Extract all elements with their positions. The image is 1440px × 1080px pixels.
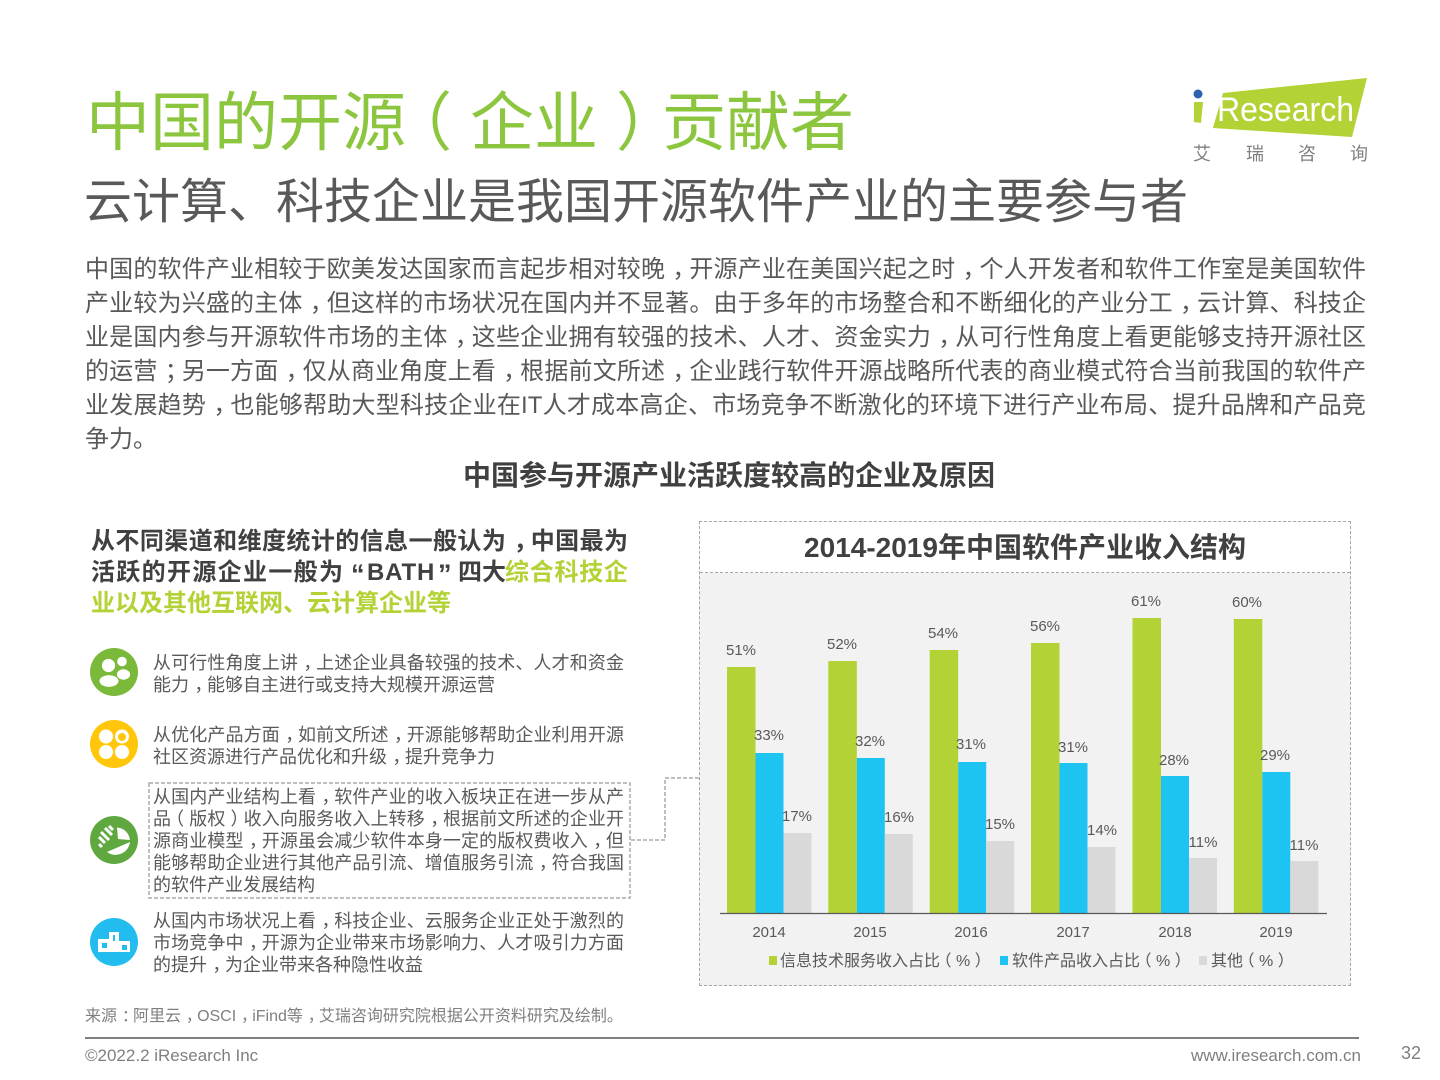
- body paragraph: 争力。: [85, 426, 157, 453]
- logo: iResearch: 咨: [1298, 140, 1316, 166]
- body paragraph: 业是国内参与开源软件市场的主体 ，这些企业拥有较强的技术、人才、资金实力 ，从可行性角度上看更能够支持开源社区: [85, 324, 1366, 351]
- bar chart: 56%: [1030, 618, 1060, 635]
- logo: iResearch: Research: [1217, 91, 1354, 129]
- bar chart: 2014: [752, 924, 786, 941]
- source note: 来源 ：阿里云 ，OSCI ，iFind等 ，艾瑞咨询研究院根据公开资料研究及绘制。: [85, 1008, 623, 1025]
- chart title: [700, 522, 1350, 573]
- callout: industry structure text: 源商业模型 ，开源虽会减少软件本身一定的版权费收入 ，但: [153, 831, 624, 851]
- text: feasibility: 能力 ，能够自主进行或支持大规模开源运营: [153, 675, 495, 695]
- body paragraph: 的运营 ；另一方面 ，仅从商业角度上看 ，根据前文所述 ，企业践行软件开源战略所代表的商业模式符合当前我国的软件产: [85, 358, 1366, 385]
- bar chart: [720, 593, 1327, 941]
- bar chart: 29%: [1260, 747, 1290, 764]
- bar chart: 31%: [956, 736, 986, 753]
- subtitle: 云计算、科技企业是我国开源软件产业的主要参与者: [84, 176, 1188, 229]
- chart legend: 其他（ % ）: [1211, 953, 1294, 970]
- icon: people group: [90, 648, 138, 696]
- bar chart: 14%: [1087, 822, 1117, 839]
- bar chart: 33%: [754, 727, 784, 744]
- page number: 32: [1401, 1043, 1421, 1063]
- bar chart: 28%: [1159, 752, 1189, 769]
- footer rule: [85, 1037, 1359, 1039]
- logo: iResearch: 艾: [1193, 140, 1211, 166]
- chart legend: 信息技术服务收入占比（ % ）: [780, 953, 991, 970]
- text: market competition: 市场竞争中 ，开源为企业带来市场影响力、人才吸引力方面: [153, 933, 624, 953]
- callout: industry structure text: 从国内产业结构上看 ，软件产业的收入板块正在进一步从产: [153, 787, 624, 807]
- chart legend: 软件产品收入占比（ % ）: [1012, 953, 1191, 970]
- left summary text: 活跃的开源企业一般为: [91, 559, 343, 586]
- callout: industry structure text: 能够帮助企业进行其他产品引流、增值服务引流 ，符合我国: [153, 853, 624, 873]
- bar chart: 11%: [1290, 837, 1318, 854]
- text: market competition: 的提升 ，为企业带来各种隐性收益: [153, 955, 423, 975]
- left summary text: 从不同渠道和维度统计的信息一般认为 ，中国最为: [91, 528, 628, 555]
- bar chart: 61%: [1131, 593, 1161, 610]
- body paragraph: 中国的软件产业相较于欧美发达国家而言起步相对较晚 ，开源产业在美国兴起之时 ，个人开发者和软件工作室是美国软件: [85, 256, 1366, 283]
- chart legend: [769, 952, 1294, 970]
- connector arrow: [631, 777, 699, 841]
- copyright: ©2022.2 iResearch Inc: [85, 1046, 258, 1065]
- text: product optimization: [153, 725, 624, 767]
- panel: chart: [699, 521, 1351, 986]
- left summary text: [91, 528, 628, 617]
- callout: industry structure text: 品（ 版权 ）收入向服务收入上转移 ，根据前文所述的企业开: [153, 809, 624, 829]
- bar chart: 2018: [1158, 924, 1192, 941]
- callout: industry structure text: 的软件产业发展结构: [153, 875, 315, 895]
- text: product optimization: 从优化产品方面 ，如前文所述 ，开源能够帮助企业利用开源: [153, 725, 624, 745]
- bar chart: 2016: [954, 924, 988, 941]
- callout: industry structure text: [148, 782, 631, 899]
- icon: podium: [90, 918, 138, 966]
- text: feasibility: 从可行性角度上讲 ，上述企业具备较强的技术、人才和资金: [153, 653, 624, 673]
- text: product optimization: 社区资源进行产品优化和升级 ，提升竞争力: [153, 747, 495, 767]
- website: www.iresearch.com.cn: [1191, 1046, 1361, 1065]
- body paragraph: [85, 256, 1366, 453]
- left summary text: BATH: [367, 559, 435, 586]
- logo: iResearch: 瑞: [1246, 140, 1264, 166]
- left summary text: 综合科技企: [505, 559, 628, 586]
- bar chart: 2017: [1056, 924, 1090, 941]
- left summary text: ”: [438, 559, 452, 589]
- bar chart: 51%: [726, 642, 756, 659]
- icon: pie slices: [90, 816, 138, 864]
- bar chart: 52%: [827, 636, 857, 653]
- left summary text: “: [351, 559, 364, 589]
- bar chart: 2019: [1259, 924, 1293, 941]
- left summary text: 业以及其他互联网、云计算企业等: [91, 590, 451, 617]
- bar chart: 17%: [782, 808, 812, 825]
- text: market competition: 从国内市场状况上看 ，科技企业、云服务企业正处于激烈的: [153, 911, 624, 931]
- chart title: 2014-2019年中国软件产业收入结构: [804, 532, 1246, 563]
- bar chart: 32%: [855, 733, 885, 750]
- bar chart: 15%: [985, 816, 1015, 833]
- icon: clover: [90, 720, 138, 768]
- title: 中国的开源（ 企业 ）贡献者: [86, 87, 854, 159]
- body paragraph: 业发展趋势 ，也能够帮助大型科技企业在IT人才成本高企、市场竞争不断激化的环境下进行产业布局、提升品牌和产品竞: [85, 392, 1366, 419]
- bar chart: 2015: [853, 924, 887, 941]
- logo: iResearch: [1193, 78, 1368, 166]
- bar chart: 54%: [928, 625, 958, 642]
- bar chart: 16%: [884, 809, 914, 826]
- bar chart: 31%: [1058, 739, 1088, 756]
- bar chart: 11%: [1189, 834, 1217, 851]
- left summary text: 四大: [458, 559, 506, 586]
- body paragraph: 产业较为兴盛的主体 ，但这样的市场状况在国内并不显著。由于多年的市场整合和不断细化的产业分工 ，云计算、科技企: [85, 290, 1366, 317]
- text: market competition: [153, 911, 624, 975]
- text: feasibility: [153, 653, 624, 695]
- bar chart: 60%: [1232, 594, 1262, 611]
- logo: iResearch: 询: [1350, 140, 1368, 166]
- section heading: 中国参与开源产业活跃度较高的企业及原因: [463, 460, 995, 491]
